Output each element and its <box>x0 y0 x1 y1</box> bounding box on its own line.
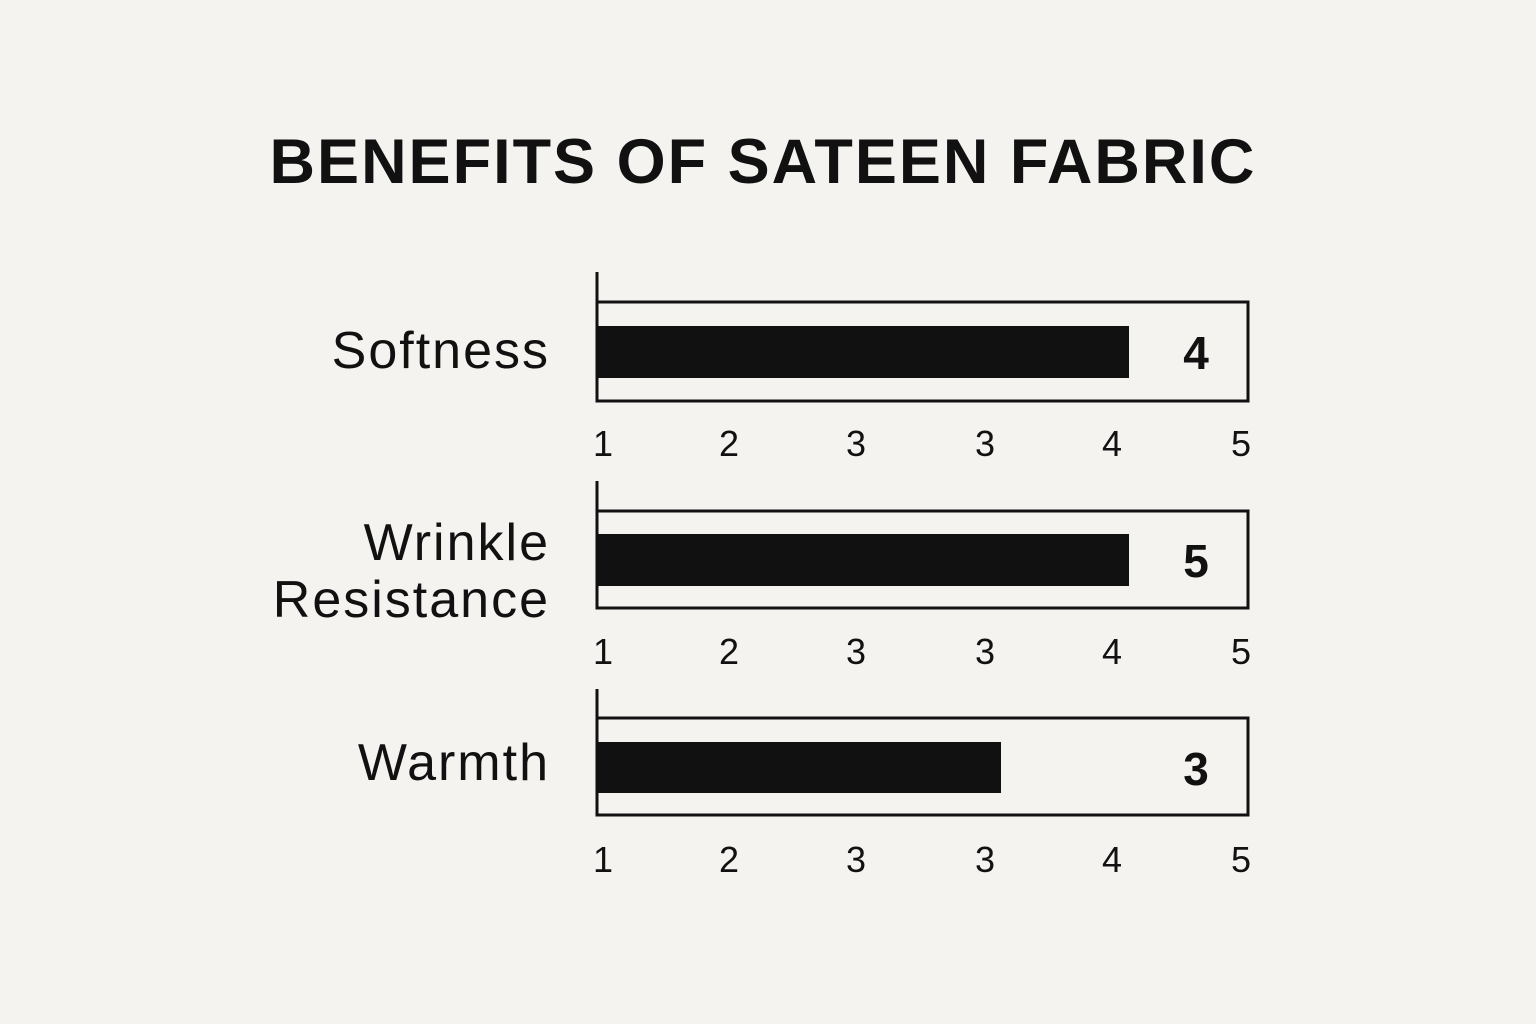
chart: Warmth: 3 <box>975 839 995 880</box>
chart: Wrinkle Resistance: 5 <box>1183 535 1209 587</box>
label: Wrinkle Resistance <box>273 514 550 629</box>
chart: Wrinkle Resistance: 3 <box>846 631 866 672</box>
chart: Wrinkle Resistance <box>593 481 1251 672</box>
chart: Wrinkle Resistance: 4 <box>1102 631 1122 672</box>
chart: Warmth: 3 <box>846 839 866 880</box>
chart: Softness: 3 <box>846 423 866 464</box>
label: Wrinkle Resistance: Wrinkle <box>364 514 550 572</box>
chart: Warmth: 3 <box>1183 743 1209 795</box>
chart: Wrinkle Resistance: 1 <box>593 631 613 672</box>
title: BENEFITS OF SATEEN FABRIC <box>270 127 1256 197</box>
chart: Warmth: 1 <box>593 839 613 880</box>
chart: Softness: 2 <box>719 423 739 464</box>
chart: Wrinkle Resistance: 3 <box>975 631 995 672</box>
label: Wrinkle Resistance: Resistance <box>273 571 550 629</box>
chart: Wrinkle Resistance: 2 <box>719 631 739 672</box>
chart: Softness: 3 <box>975 423 995 464</box>
label: Warmth: Warmth <box>358 734 550 792</box>
chart: Warmth <box>593 689 1251 880</box>
label: Softness: Softness <box>332 322 550 380</box>
chart: Softness: 5 <box>1231 423 1251 464</box>
chart: Softness: 4 <box>1102 423 1122 464</box>
chart: Warmth: 5 <box>1231 839 1251 880</box>
chart: Softness: 1 <box>593 423 613 464</box>
chart: Warmth: 4 <box>1102 839 1122 880</box>
chart: Wrinkle Resistance: 5 <box>1231 631 1251 672</box>
chart: Warmth: 2 <box>719 839 739 880</box>
chart: Softness <box>593 272 1251 464</box>
chart: Softness: 4 <box>1183 327 1209 379</box>
